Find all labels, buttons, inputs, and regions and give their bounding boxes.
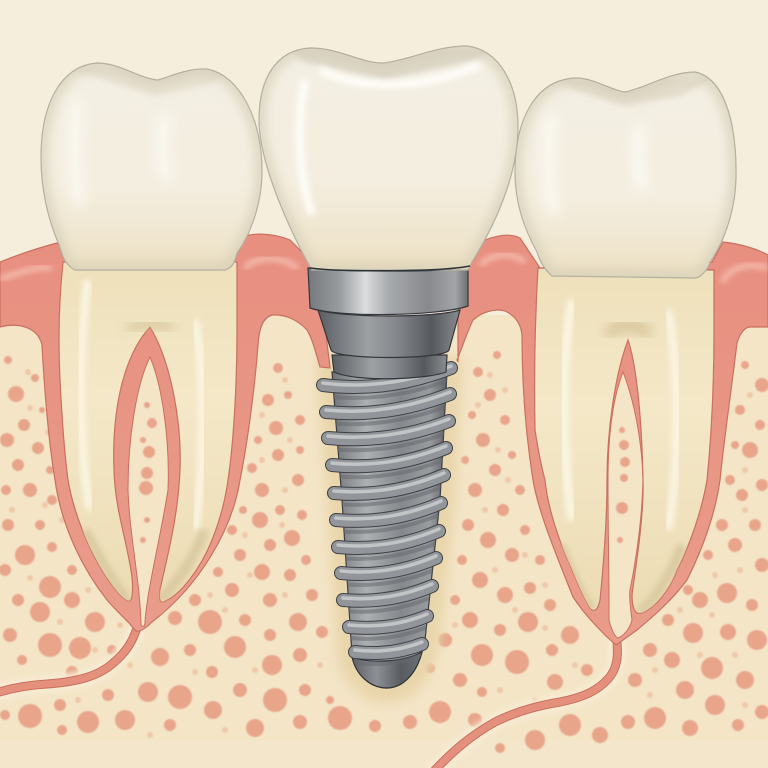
left crown [41,63,262,270]
gum highlight centre [480,255,525,265]
gum highlight right [245,259,298,268]
small bone pores [9,369,753,738]
implant [308,268,468,688]
crown base line [310,266,470,271]
body shadow rings [334,378,446,666]
implant socket halo [332,372,447,688]
centre crown [259,46,518,271]
nerve left [0,628,137,693]
implant collar [308,268,468,315]
right tooth root [535,268,714,613]
bone tissue [0,315,768,768]
right tooth gum and ligament [457,235,768,645]
crown occlusal bevel [564,78,704,106]
left tooth root [59,262,237,602]
nerve right [435,642,617,768]
left fork bone gap [128,357,168,626]
implant lower collar ring [332,355,447,379]
crown occlusal bevel [296,49,484,80]
gum highlight left [0,268,52,279]
implant screw body [332,372,447,688]
crown occlusal bevel [86,68,216,96]
bone marrow pores [0,351,768,753]
implant threads [323,366,451,653]
gum highlight right [722,266,768,282]
right crown [515,72,736,278]
right fork bone gap [608,372,643,638]
left tooth gum and ligament [0,234,330,631]
implant tip [352,652,422,688]
implant neck [318,310,460,358]
